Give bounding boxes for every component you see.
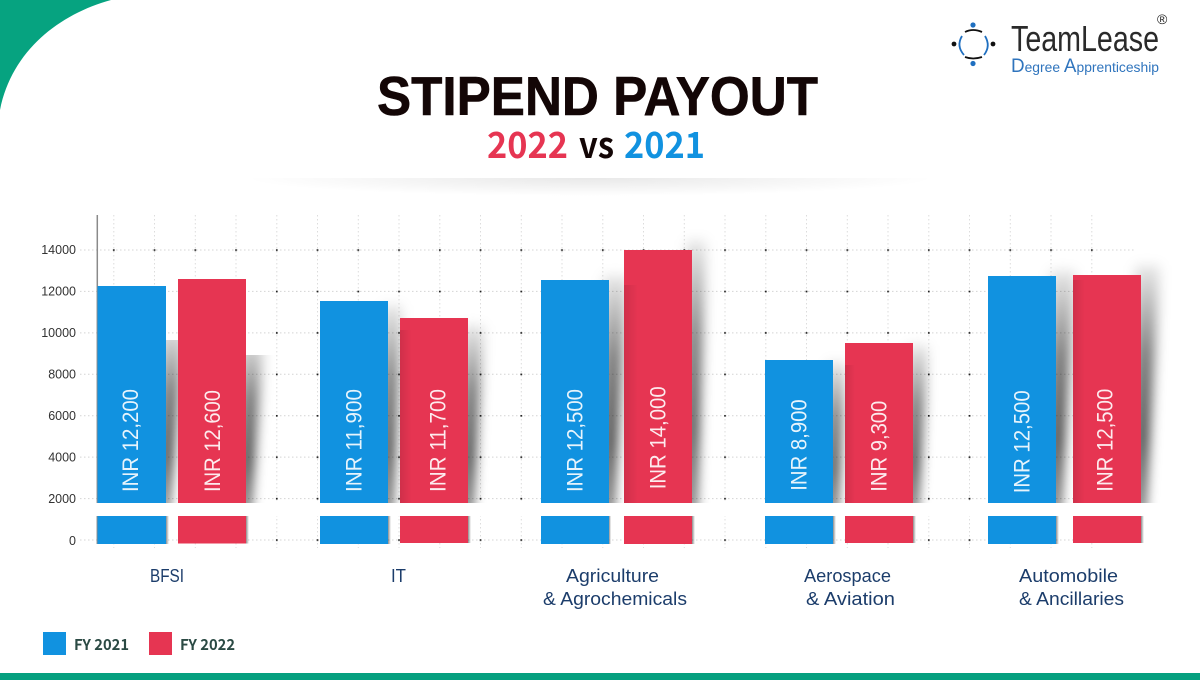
bar: BFSI FY 2021: INR 12,200 [118,389,143,492]
bar: Aerospace FY 2022: INR 9,300 [866,401,891,492]
category label: IT [391,565,406,586]
decorative green corner [0,0,111,110]
legend item: FY 2022: FY 2022 [180,634,235,655]
bar: BFSI FY 2022 [178,279,249,544]
bar: Automobile FY 2021: INR 12,500 [1010,390,1035,493]
bar: IT FY 2021 [320,301,391,544]
bar group: Aerospace & Aviation [765,343,928,609]
y axis labels: 12000 [41,284,76,298]
legend item: FY 2021 [43,632,129,655]
logo wordmark: TeamLease [1011,18,1159,59]
bar: Agriculture FY 2021: INR 12,500 [563,389,588,492]
logo: TeamLease Degree Apprenticeship [952,11,1168,77]
y axis line [96,215,98,544]
category label [804,565,895,609]
y axis labels: 10000 [41,326,76,340]
category label [543,565,687,609]
y axis labels: 6000 [48,409,76,423]
title: STIPEND PAYOUT [377,65,818,127]
subtitle: 2022 vs 2021: 2021 [624,117,705,169]
bar shadows [1050,265,1160,515]
bar: Automobile FY 2022 [1073,275,1144,543]
bar: Agriculture FY 2022 [624,250,695,544]
legend [43,632,235,655]
bar group: BFSI [98,279,264,586]
logo tagline: Degree Apprenticeship [1011,56,1159,77]
bar: BFSI FY 2021 [98,286,169,544]
bar: Agriculture FY 2021 [541,280,611,544]
y axis labels: 2000 [48,492,76,506]
bar shadows [603,240,706,515]
bar: IT FY 2022 [400,318,471,543]
bar shadows [827,345,928,515]
title shadow [373,178,806,190]
category label [1019,565,1124,609]
subtitle: 2022 vs 2021: 2022 [487,117,568,169]
icon: logo circle of dots and arcs [952,22,995,66]
category label: & Ancillaries [1019,588,1124,609]
registered mark: ® [1157,11,1168,27]
bar: IT FY 2022: INR 11,700 [426,389,450,492]
bar: BFSI FY 2022: INR 12,600 [200,390,225,492]
bar: Aerospace FY 2022 [845,343,916,543]
legend item: FY 2021: FY 2021 [74,634,129,655]
y axis labels [41,243,76,548]
bar group: Agriculture & Agrochemicals [541,240,706,609]
category label: Aerospace [804,565,891,586]
subtitle: 2022 vs 2021: vs [579,117,614,169]
y axis labels: 14000 [41,243,76,257]
chart gridlines [78,215,1146,548]
bar: Automobile FY 2022: INR 12,500 [1093,389,1118,492]
category label: Agriculture [566,565,659,586]
bar group: Automobile & Ancillaries [988,265,1160,609]
bottom green bar [0,673,1200,680]
bar group: IT [320,301,484,586]
bar: Automobile FY 2021 [988,276,1059,544]
bar: Agriculture FY 2022: INR 14,000 [646,386,671,489]
y axis labels: 0 [69,534,76,548]
y axis labels: 8000 [48,368,76,382]
category label: & Aviation [806,588,895,609]
y axis labels: 4000 [48,450,76,464]
category label: & Agrochemicals [543,588,687,609]
bar: IT FY 2021: INR 11,900 [342,389,367,492]
bar shadows [166,340,268,503]
bar shadows [382,305,484,515]
bar: Aerospace FY 2021 [765,360,836,544]
legend item: FY 2022 [149,632,235,655]
category label: Automobile [1019,565,1118,586]
bar: Aerospace FY 2021: INR 8,900 [787,399,812,491]
category label: BFSI [150,565,184,586]
subtitle: 2022 vs 2021 [487,117,705,169]
